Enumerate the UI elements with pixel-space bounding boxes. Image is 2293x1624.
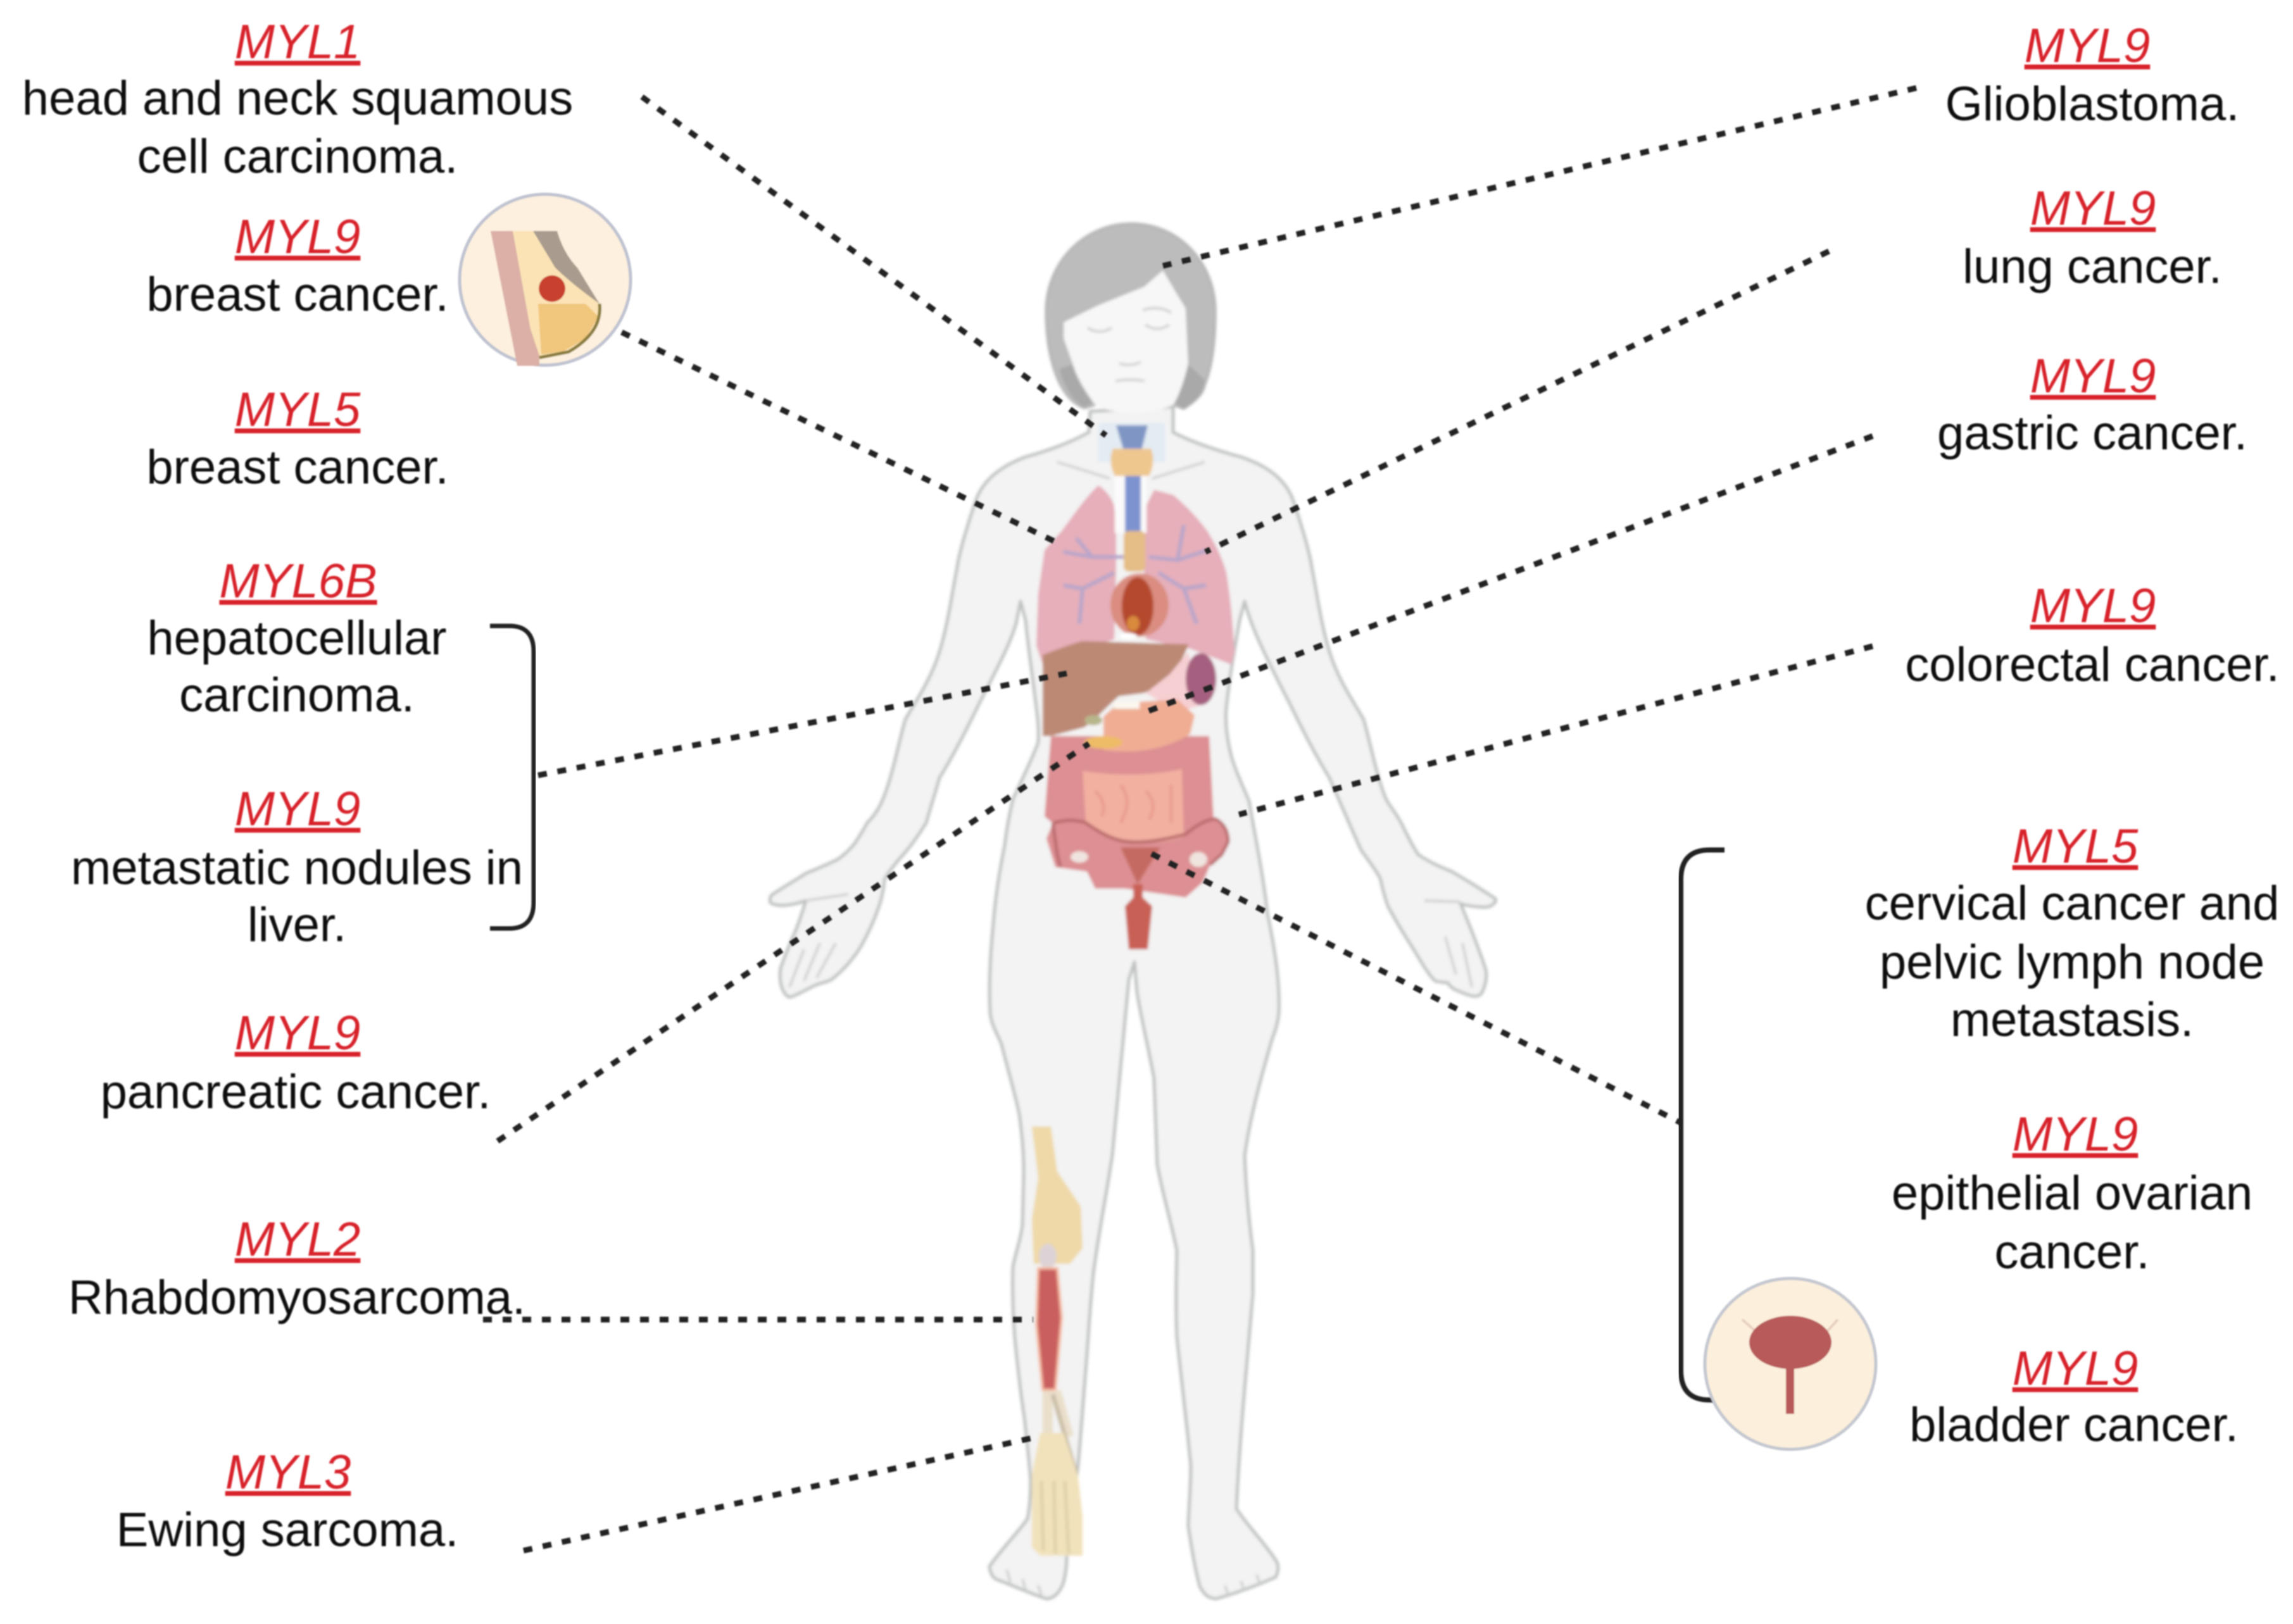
label: MYL5 cervical: MYL5: [2013, 820, 2139, 873]
fibula: [1053, 1394, 1076, 1474]
bracket: liver: [490, 626, 534, 928]
small intestine folds: [1095, 785, 1171, 823]
label: MYL9 liver: [71, 782, 523, 952]
label: MYL9 glioblastoma: MYL9: [2025, 19, 2150, 73]
body silhouette: [770, 407, 1496, 1599]
label: MYL2 rhabdomyosarcoma: Rhabdomyosarcoma.: [68, 1271, 525, 1325]
human body figure: [770, 223, 1496, 1599]
label: MYL9 liver: MYL9: [235, 782, 360, 836]
oesophagus: [1124, 531, 1145, 572]
right lung: [1144, 490, 1234, 665]
label: MYL6B liver: hepatocellular: [147, 611, 447, 665]
label: MYL5 cervical: pelvic lymph node: [1880, 935, 2265, 989]
leader: lung: [1205, 251, 1829, 552]
label: MYL9 liver: liver.: [248, 898, 346, 952]
leader: pancreatic: [498, 744, 1089, 1141]
leader: uterus and pelvis: [1152, 854, 1681, 1123]
dotted leader lines: [483, 88, 1916, 1551]
label: MYL2 rhabdomyosarcoma: MYL2: [235, 1213, 360, 1266]
bronchi: [1064, 525, 1206, 623]
label: MYL3 ewing: Ewing sarcoma.: [116, 1503, 458, 1557]
label: MYL9 liver: metastatic nodules in: [71, 841, 523, 895]
leader: colorectal: [1239, 646, 1873, 815]
label: MYL5 breast: breast cancer.: [146, 440, 449, 494]
label: MYL5 cervical: metastasis.: [1951, 993, 2194, 1047]
liver: [1043, 641, 1188, 736]
label: MYL9 pancreatic: [101, 1006, 491, 1119]
label: MYL9 lung: lung cancer.: [1963, 240, 2222, 294]
label: MYL9 breast: breast cancer.: [146, 268, 449, 322]
stomach: [1103, 652, 1200, 752]
darker lower hair: [1059, 364, 1205, 408]
closed eyes, nose and mouth: [1088, 308, 1171, 381]
label: MYL9 pancreatic: MYL9: [235, 1006, 360, 1060]
label: MYL6B liver: MYL6B: [219, 554, 377, 608]
label: MYL1 head and neck: head and neck squamous: [22, 72, 573, 125]
spleen: [1186, 653, 1216, 705]
gall bladder: [1084, 715, 1102, 725]
label: MYL9 colorectal: [1905, 579, 2280, 692]
label: MYL9 gastric: MYL9: [2030, 349, 2156, 403]
small intestine: [1083, 769, 1184, 842]
pancreas: [1084, 736, 1122, 749]
bracket: pelvic cancers: [1681, 850, 1724, 1400]
shin bones: [1048, 1391, 1069, 1437]
leader: rhabdomyosarcoma: [483, 1316, 1033, 1323]
bowel edge: [1053, 819, 1228, 867]
hand creases, toes and collar lines: [789, 462, 1472, 1595]
icon: breast tumour: [460, 194, 631, 366]
label: MYL1 head and neck: cell carcinoma.: [137, 130, 458, 184]
ankle and foot bones: [1032, 1433, 1083, 1556]
label: MYL9 bladder: MYL9: [2013, 1342, 2138, 1396]
leader: ewing sarcoma: [524, 1438, 1033, 1551]
cervix and vagina: [1125, 884, 1152, 949]
label: MYL6B liver: [147, 554, 447, 722]
knee gap: [1039, 1244, 1057, 1269]
uterus: [1121, 847, 1160, 884]
label: MYL5 cervical: cervical cancer and: [1865, 877, 2279, 930]
label: MYL5 breast: MYL5: [235, 383, 361, 437]
label: MYL9 gastric: gastric cancer.: [1937, 406, 2247, 460]
label: MYL9 pancreatic: pancreatic cancer.: [101, 1065, 491, 1119]
large intestine and pelvic bowel: [1045, 736, 1228, 897]
leader: breast: [622, 332, 1055, 542]
label: MYL9 colorectal: colorectal cancer.: [1905, 638, 2280, 692]
label: MYL9 lung: [1963, 182, 2222, 294]
leader: glioblastoma: [1163, 88, 1916, 266]
trachea: [1115, 446, 1146, 533]
femur and knee bones: [1032, 1127, 1083, 1264]
label: MYL9 breast: MYL9: [235, 210, 360, 264]
label: MYL9 colorectal: MYL9: [2030, 579, 2156, 633]
label: MYL9 bladder: [1909, 1342, 2239, 1452]
label: MYL3 ewing: MYL3: [225, 1446, 351, 1499]
leader: liver: [538, 673, 1067, 775]
leader: gastric: [1146, 436, 1873, 712]
label: MYL9 gastric: [1937, 349, 2247, 460]
label: MYL9 ovarian: epithelial ovarian: [1892, 1166, 2252, 1220]
hair: [1046, 223, 1216, 409]
label: MYL9 lung: MYL9: [2030, 182, 2156, 235]
icon: bladder: [1705, 1278, 1876, 1449]
label: MYL9 ovarian: MYL9: [2013, 1108, 2138, 1161]
heart: [1110, 573, 1169, 639]
label: MYL9 breast: [146, 210, 449, 322]
label: MYL3 ewing: [116, 1446, 458, 1557]
label: MYL9 glioblastoma: Glioblastoma.: [1945, 77, 2239, 131]
label: MYL9 glioblastoma: [1945, 19, 2239, 131]
foot bone lines: [1041, 1481, 1069, 1554]
label: MYL5 breast: [146, 383, 449, 494]
thyroid: [1111, 449, 1153, 476]
label: MYL5 cervical: [1865, 820, 2279, 1047]
label: MYL1 head and neck: [22, 15, 573, 184]
label: MYL9 ovarian: cancer.: [1994, 1225, 2150, 1279]
label: MYL9 bladder: bladder cancer.: [1909, 1398, 2239, 1452]
left lung: [1036, 485, 1116, 665]
ovaries: [1071, 851, 1207, 867]
leader: head and neck: [642, 97, 1106, 435]
throat: [1098, 423, 1165, 462]
label: MYL6B liver: carcinoma.: [179, 668, 415, 722]
label: MYL2 rhabdomyosarcoma: [68, 1213, 525, 1325]
face: [1064, 270, 1188, 413]
label: MYL9 ovarian: [1892, 1108, 2252, 1279]
label: MYL1 head and neck: MYL1: [235, 15, 360, 69]
leg muscle: [1036, 1268, 1062, 1390]
